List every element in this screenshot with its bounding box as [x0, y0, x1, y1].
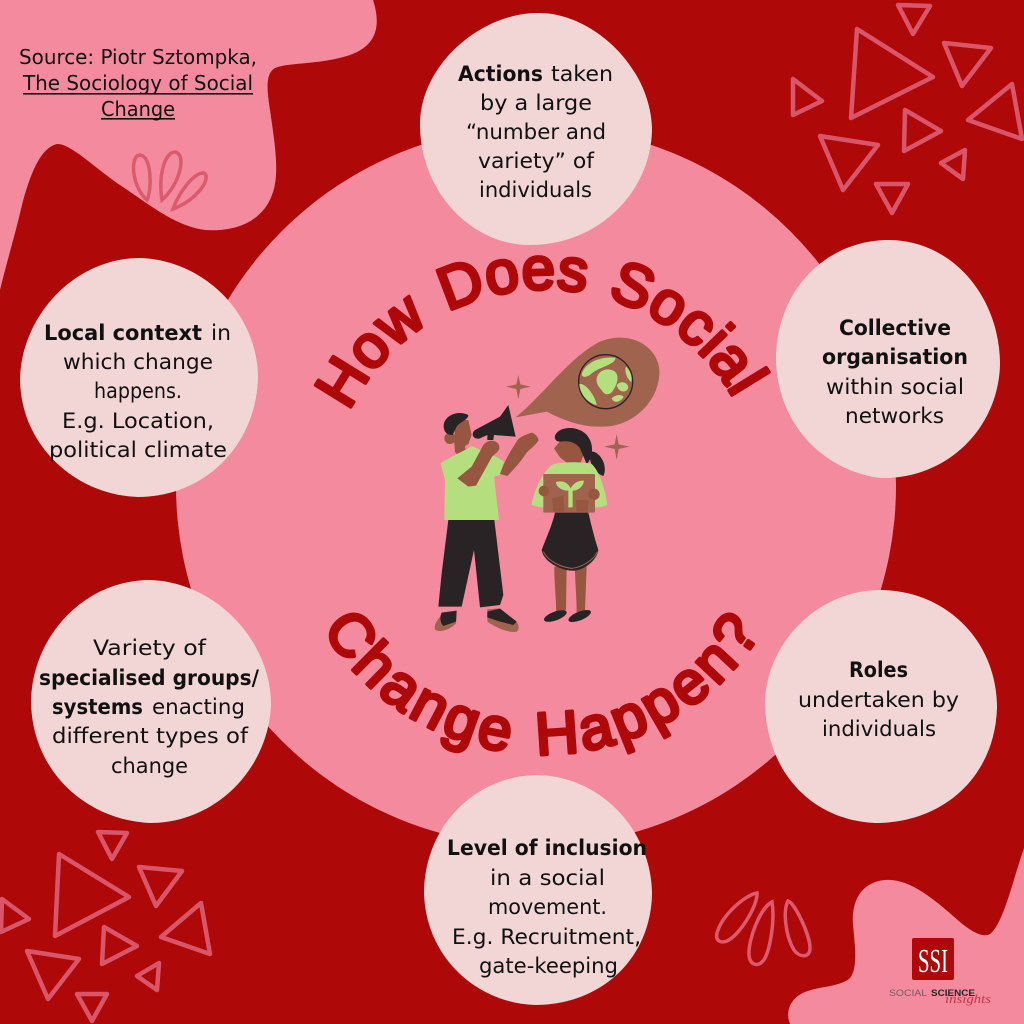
bubble: collective organisation: within social	[826, 375, 964, 399]
bubble: actions: variety” of	[478, 149, 595, 173]
bubble: roles: individuals	[822, 717, 936, 741]
title: curved heading: How Does Social	[314, 255, 771, 409]
logo: Social Science Insights	[889, 938, 991, 1006]
logo: Social Science Insights: SSI	[918, 943, 948, 980]
bubble: actions: individuals	[479, 178, 592, 202]
title: curved heading: Change Happen?	[328, 612, 756, 756]
bubble: actions: by a large	[480, 91, 592, 115]
main circle	[176, 126, 896, 846]
bubble: collective organisation: networks	[845, 404, 944, 428]
logo: Social Science Insights: SOCIAL	[889, 988, 927, 998]
bubble: actions: Actions	[458, 62, 543, 86]
blob: bottom-right corner	[788, 848, 1024, 1024]
source citation: Source: Piotr Sztompka,	[19, 45, 257, 69]
bubble: collective organisation: Collective	[839, 316, 951, 340]
bubble: local context: political climate	[49, 438, 227, 462]
bubble: specialised groups: specialised groups/	[39, 666, 259, 690]
logo: Social Science Insights: insights	[945, 991, 991, 1006]
source citation: The Sociology of Social	[22, 71, 253, 95]
bubble: level of inclusion	[424, 775, 652, 1005]
triangles: bottom-left cluster	[1, 832, 210, 1021]
man	[435, 405, 538, 632]
bubble: actions: taken	[551, 62, 613, 86]
decorative leaves: bottom-centre-right	[717, 893, 810, 964]
title: curved heading	[314, 255, 771, 756]
bubble: local context	[20, 258, 258, 497]
bubble: collective organisation: organisation	[822, 345, 968, 369]
bubble: roles	[765, 590, 997, 823]
source citation	[19, 45, 257, 121]
bubble: roles: undertaken by	[798, 688, 959, 712]
blob: top-left corner	[0, 0, 377, 290]
bubble: actions	[420, 13, 652, 245]
bubble: level of inclusion: Level of inclusion	[447, 836, 647, 860]
bubble: specialised groups: enacting	[152, 695, 245, 719]
bubble: level of inclusion: E.g. Recruitment,	[452, 925, 641, 949]
bubble: level of inclusion: in a social	[490, 866, 605, 890]
bubble: level of inclusion: gate-keeping	[479, 954, 618, 978]
logo: Social Science Insights: SCIENCE	[931, 988, 975, 998]
triangles: top-right cluster	[793, 5, 1022, 213]
bubble: local context: happens.	[94, 379, 182, 403]
decorative leaves: top-left	[134, 152, 206, 209]
bubble: roles: Roles	[849, 658, 908, 682]
bubble: local context: in	[211, 321, 231, 345]
source citation: Change	[101, 97, 175, 121]
woman	[532, 428, 607, 625]
sparkle left	[506, 375, 531, 399]
bubble: specialised groups: change	[111, 754, 188, 778]
sparkle right	[604, 434, 629, 460]
bubble: local context: E.g. Location,	[62, 409, 214, 433]
globe	[579, 355, 633, 409]
bubble: local context: Local context	[44, 321, 202, 345]
bubble: specialised groups: systems	[52, 695, 143, 719]
speech bubble	[516, 338, 659, 427]
bubble: actions: “number and	[466, 120, 606, 144]
bubble: specialised groups: Variety of	[93, 636, 207, 660]
bubble: local context: which change	[63, 350, 213, 374]
bubble: collective organisation	[776, 240, 1000, 478]
bubble: specialised groups: different types of	[52, 724, 249, 748]
bubble: level of inclusion: movement.	[488, 895, 607, 919]
illustration: two activists with megaphone, speech bubble and sign	[435, 338, 659, 632]
bubble: specialised groups	[31, 580, 271, 823]
